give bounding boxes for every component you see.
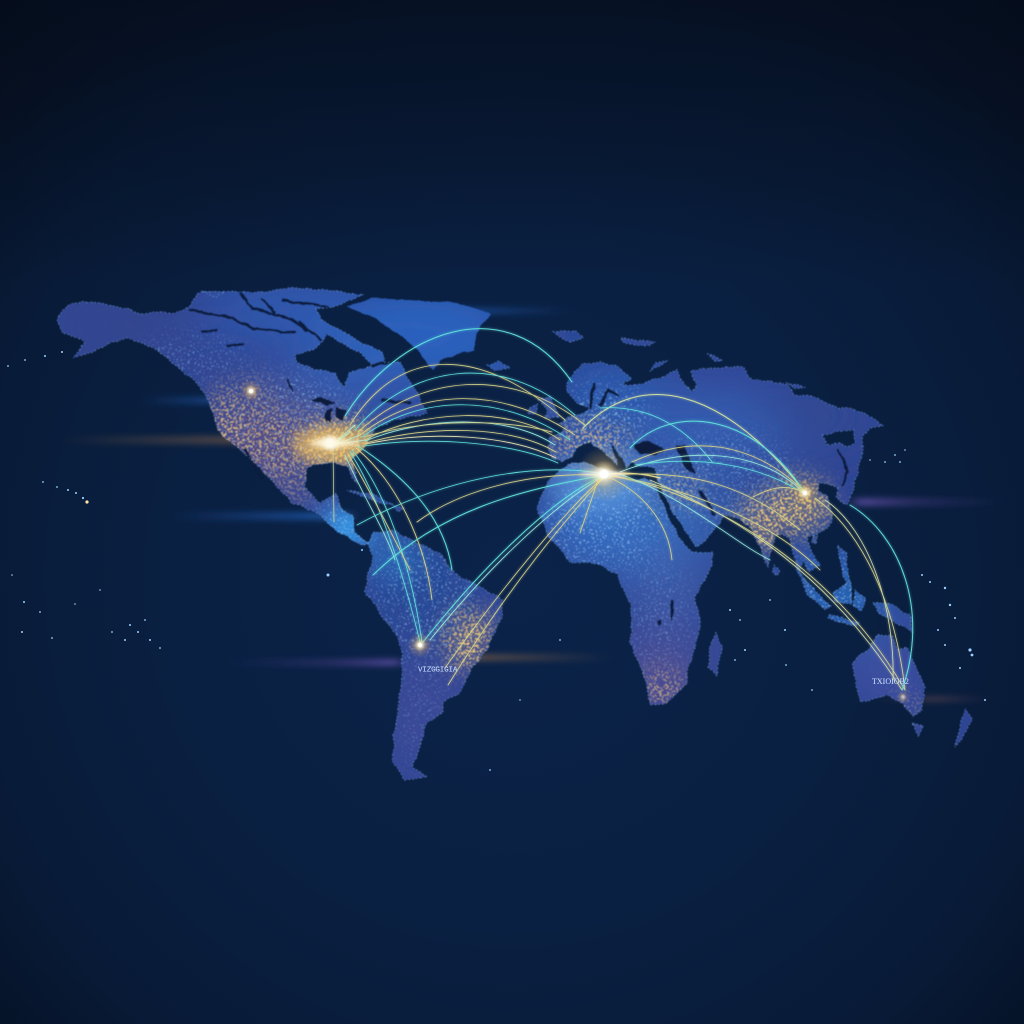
label: South America: VIZGGIGIA [418, 666, 458, 674]
label: Australia: TXIOIOB2 [872, 677, 909, 686]
hub: central South America [407, 632, 433, 658]
connection arcs [332, 329, 913, 690]
hub: eastern United States [284, 423, 376, 463]
hub: Canada small light [240, 380, 262, 402]
arcs: Mediterranean hub to Asia [583, 395, 905, 690]
arcs: China hub to Australia [815, 498, 913, 690]
arcs: Mediterranean hub across the Atlantic [357, 470, 672, 685]
hub: Mediterranean [576, 446, 632, 502]
hub: eastern China [791, 479, 819, 507]
arcs: North America to Europe [332, 329, 585, 463]
Pacific and Indian Ocean island lights [7, 351, 986, 771]
arcs: North America to South America [333, 446, 452, 642]
world map landmasses [56, 286, 973, 782]
city lights: warm speckle [200, 363, 923, 733]
hub: Australia [896, 690, 910, 704]
inland seas, lakes and straits [190, 293, 848, 626]
lens flare streaks [60, 308, 1005, 702]
city lights: cool speckle [144, 315, 890, 774]
coastal city light edge [57, 288, 972, 780]
